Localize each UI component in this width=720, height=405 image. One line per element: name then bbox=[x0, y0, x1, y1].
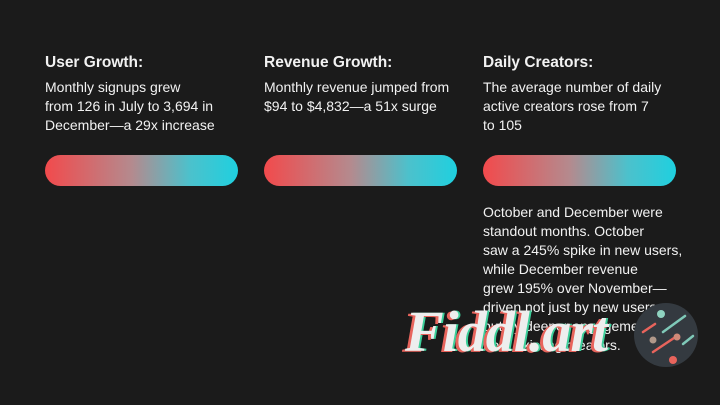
panel: daily creators bbox=[483, 54, 662, 133]
text: summary: October and December were bbox=[483, 204, 663, 220]
icon: logo circle bbox=[634, 303, 698, 367]
text: The average number of daily bbox=[483, 79, 661, 95]
panel: revenue growth bbox=[264, 54, 449, 114]
text: December—a 29x increase bbox=[45, 117, 215, 133]
panel: user growth bbox=[45, 54, 215, 133]
text bbox=[264, 79, 449, 114]
text: summary: standout months. October bbox=[483, 223, 644, 239]
text: Monthly signups grew bbox=[45, 79, 180, 95]
text: summary: saw a 245% spike in new users, bbox=[483, 242, 682, 258]
text: summary: while December revenue bbox=[483, 261, 638, 277]
heading: Revenue Growth: bbox=[264, 54, 392, 71]
text: summary: from existing creators. bbox=[483, 337, 621, 353]
bar: revenue bbox=[264, 155, 457, 186]
heading: User Growth: bbox=[45, 54, 143, 71]
bar: creators bbox=[483, 155, 676, 186]
text bbox=[483, 79, 662, 133]
text: summary bbox=[483, 204, 682, 353]
text: from 126 in July to 3,694 in bbox=[45, 98, 213, 114]
text: $94 to $4,832—a 51x surge bbox=[264, 98, 437, 114]
text: to 105 bbox=[483, 117, 522, 133]
text: summary: grew 195% over November— bbox=[483, 280, 667, 296]
text: summary: driven not just by new users, bbox=[483, 299, 660, 315]
text: Monthly revenue jumped from bbox=[264, 79, 449, 95]
bar: user growth bbox=[45, 155, 238, 186]
text: summary: but by deeper engagement bbox=[483, 318, 650, 334]
text bbox=[45, 79, 215, 133]
logo: Fiddl.art: Fiddl.art bbox=[405, 299, 607, 364]
heading: Daily Creators: bbox=[483, 54, 593, 71]
text: active creators rose from 7 bbox=[483, 98, 649, 114]
